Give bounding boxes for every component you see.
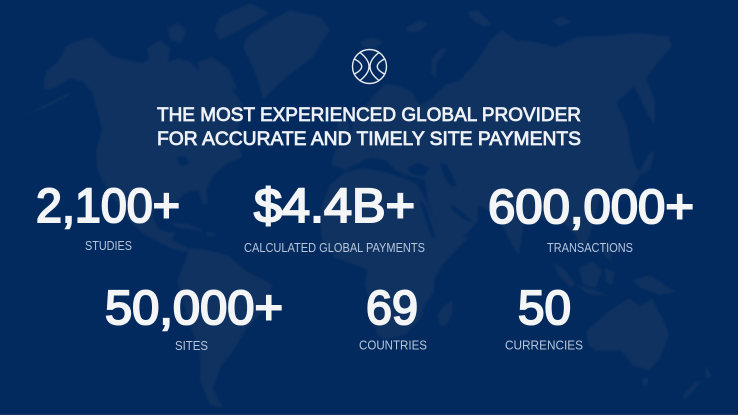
stat: currencies: 50 — [518, 282, 571, 335]
icon: globe logo — [352, 50, 386, 84]
title: THE MOST EXPERIENCED GLOBAL PROVIDER — [157, 104, 581, 126]
stat: countries: COUNTRIES — [359, 338, 427, 352]
stat: sites: SITES — [175, 339, 208, 353]
map: eurasia — [331, 30, 672, 255]
stat: transactions: TRANSACTIONS — [547, 241, 633, 255]
stat: sites: 50,000+ — [105, 282, 283, 335]
stat: studies: STUDIES — [85, 239, 132, 253]
stat: countries: 69 — [366, 282, 418, 335]
title — [157, 104, 581, 150]
stat: calculated global payments — [244, 180, 425, 255]
map: australia — [586, 298, 669, 371]
map: new zealand — [682, 365, 712, 401]
map: africa — [320, 168, 470, 340]
stat: studies: 2,100+ — [36, 180, 180, 233]
stat: currencies: CURRENCIES — [505, 338, 583, 352]
map: madagascar — [438, 300, 453, 326]
map: tasmania — [642, 378, 649, 385]
map: south america — [177, 248, 273, 408]
map: japan — [635, 150, 655, 178]
map: greenland — [243, 10, 330, 100]
map: southeast asia islands — [553, 240, 676, 295]
stat: countries — [359, 282, 427, 352]
stat: transactions: 600,000+ — [488, 181, 694, 234]
stat: currencies — [505, 282, 583, 352]
bottom edge strip — [0, 414, 738, 415]
map: arctic and atlantic islands — [335, 10, 572, 140]
title: FOR ACCURATE AND TIMELY SITE PAYMENTS — [157, 128, 581, 150]
stat: calculated global payments: $4.4B+ — [254, 180, 415, 233]
stat: calculated global payments: CALCULATED GLOBAL PAYMENTS — [244, 241, 425, 255]
map: north america — [22, 3, 270, 252]
map: inland seas — [177, 90, 650, 238]
